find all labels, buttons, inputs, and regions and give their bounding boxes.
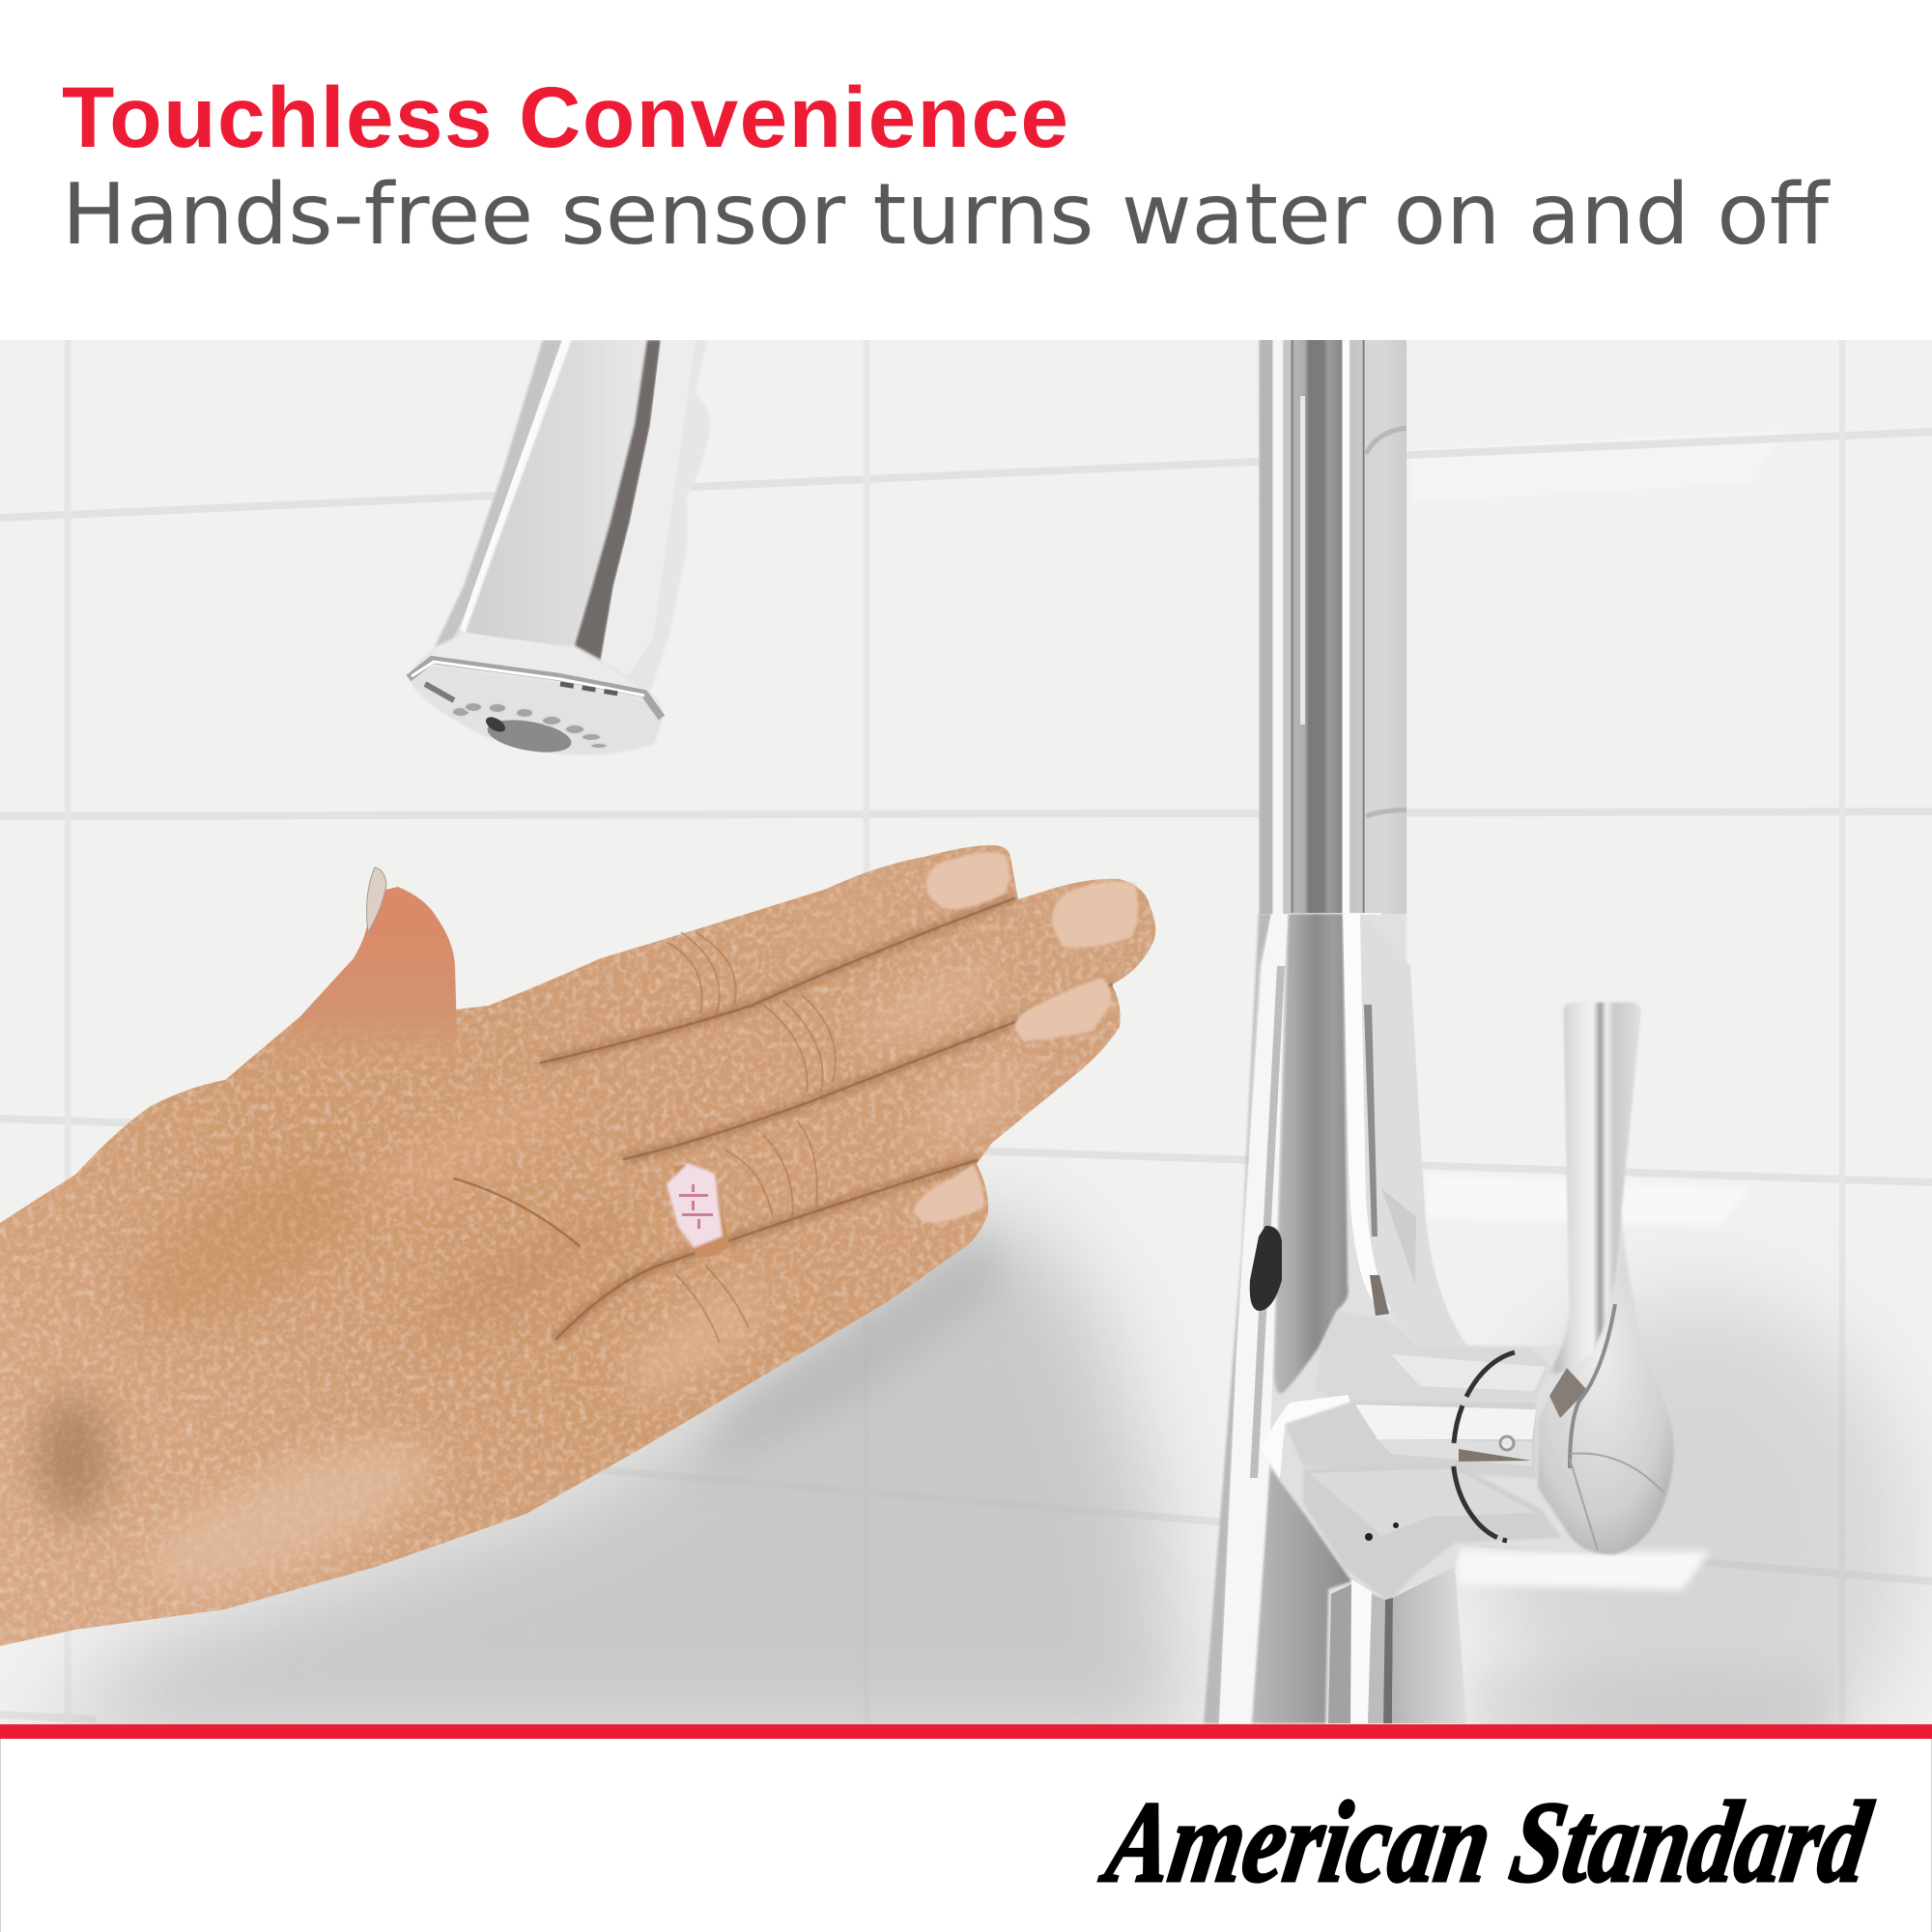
hand shadow on wall — [29, 1198, 1188, 1748]
index fingernail — [926, 852, 1009, 909]
left gray band — [435, 340, 562, 647]
chrome collar ring — [1453, 1352, 1515, 1541]
centre panel — [466, 340, 587, 644]
fingernails — [913, 852, 1138, 1223]
dark reflection stripe — [575, 340, 661, 660]
spray head body — [414, 341, 709, 711]
tube highlight — [1300, 396, 1305, 724]
spray face — [409, 667, 662, 754]
upper hub — [1315, 1311, 1551, 1405]
right bright band — [601, 340, 663, 661]
aerator — [487, 720, 572, 753]
red divider bar — [0, 1724, 1932, 1739]
mid band — [1285, 1402, 1536, 1478]
bright strip — [460, 340, 572, 633]
knuckle wrinkles — [667, 932, 836, 1343]
title: Touchless Convenience — [62, 69, 1068, 165]
base riser dark panel — [1252, 1468, 1351, 1723]
little fingernail — [913, 1164, 984, 1223]
faucet silhouette — [1204, 340, 1674, 1723]
tile bevel highlights — [1426, 1174, 1750, 1590]
lower body centre panel — [1274, 914, 1349, 1393]
main faucet spout — [1204, 340, 1674, 1723]
thumb — [270, 887, 458, 1067]
spray nozzles — [452, 702, 608, 749]
thumb nail — [367, 867, 386, 932]
ring — [667, 1163, 729, 1258]
panel: photo of hand under touchless faucet — [0, 340, 1932, 1797]
lower shoulder — [452, 633, 558, 645]
chrome rim — [409, 660, 662, 718]
finger gaps — [454, 898, 1112, 1339]
tile wall — [0, 340, 1932, 1724]
lower body outer strips — [1204, 914, 1289, 1723]
collar screw — [1500, 1436, 1514, 1450]
spray head of pull-down faucet — [409, 340, 710, 757]
wrist and tendon shading — [36, 878, 1112, 1619]
upper tube — [1259, 340, 1406, 914]
chrome stripe — [1343, 914, 1391, 1310]
hand — [0, 845, 1155, 1646]
base riser stripes — [1328, 1567, 1466, 1723]
soft wall shading lower right — [1468, 1294, 1913, 1797]
subtitle: Hands-free sensor turns water on and off — [62, 165, 1831, 264]
ring fingernail — [1014, 978, 1111, 1041]
hub white gap — [1261, 1395, 1352, 1478]
tube reflected grout — [1366, 428, 1406, 816]
lever dark highlight — [1549, 1368, 1587, 1418]
collar seam — [1289, 913, 1381, 915]
middle fingernail — [1052, 881, 1138, 948]
side jet slot — [425, 684, 454, 700]
motion sensor window — [1250, 1226, 1282, 1311]
footer edges — [0, 1739, 1932, 1932]
lower lobe — [1303, 1463, 1562, 1602]
lever knob — [1538, 1246, 1674, 1554]
hand and fingers — [0, 845, 1155, 1646]
finger gap shadows — [541, 898, 1112, 1339]
lever handle stem — [1546, 1003, 1640, 1376]
